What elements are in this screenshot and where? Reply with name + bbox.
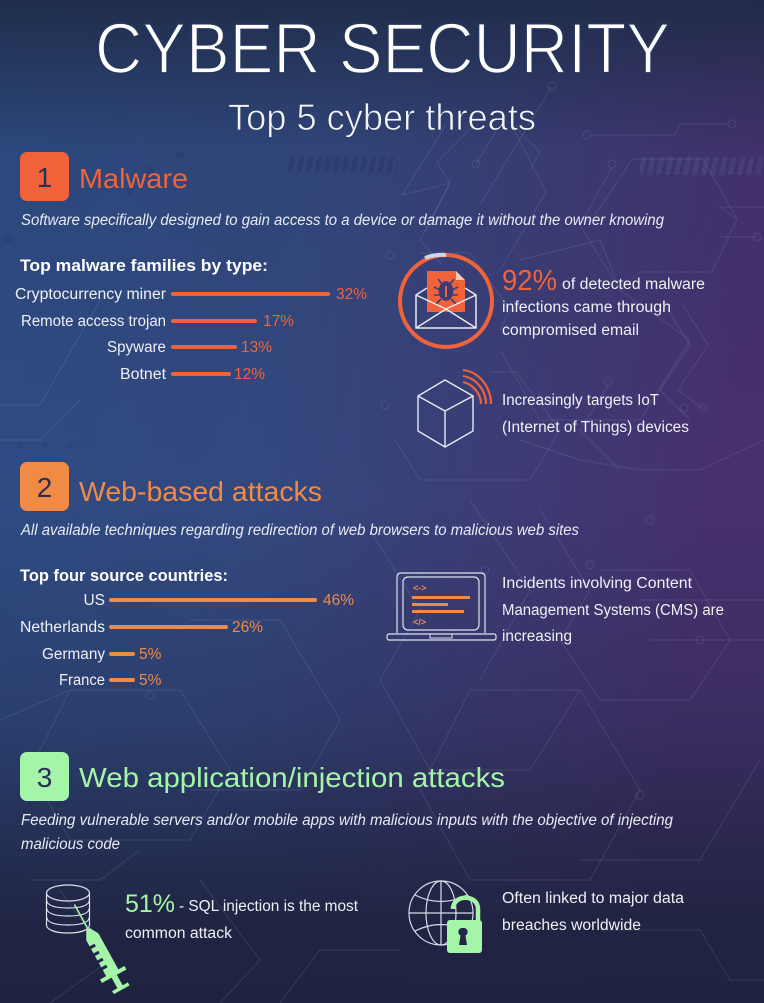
- bar chart: malware families: 17%: [263, 313, 294, 330]
- stat: 51% sql injection: common attack: [125, 925, 232, 942]
- subtitle: Top 5 cyber threats: [228, 97, 536, 138]
- decorative hash band: [3, 151, 764, 448]
- bar chart: malware families: [15, 286, 367, 383]
- injection description: malicious code: [21, 836, 120, 853]
- web attacks description: All available techniques regarding redirection of web browsers to malicious web sites: [20, 522, 579, 539]
- stat: 92% email: compromised email: [502, 322, 639, 339]
- injection description: Feeding vulnerable servers and/or mobile apps with malicious inputs with the objective of injecting: [21, 812, 673, 829]
- text: iot: Increasingly targets IoT: [502, 392, 660, 409]
- chart heading: source countries: Top four source countries:: [20, 566, 228, 585]
- number badge 2: [20, 462, 69, 511]
- text: iot: [502, 392, 689, 436]
- bar chart: malware families: 32%: [336, 286, 367, 303]
- bar chart: malware families: Botnet: [120, 366, 167, 383]
- heading: web-based attacks: Web-based attacks: [79, 476, 322, 507]
- number badge 2: 2: [37, 472, 52, 503]
- title: CYBER SECURITY: [95, 10, 670, 89]
- text: data breaches: Often linked to major data: [502, 890, 684, 907]
- panel: malware: [15, 152, 705, 447]
- injection description: [21, 812, 673, 853]
- stat: 51% sql injection: [125, 890, 359, 942]
- text: cms incidents: increasing: [502, 628, 572, 645]
- bar chart: source countries: 46%: [323, 592, 354, 609]
- icon: database and syringe: [46, 885, 134, 997]
- panel: web-based attacks: [20, 462, 724, 689]
- stat: 51% sql injection: 51%: [125, 890, 175, 918]
- text: cms incidents: [502, 575, 724, 645]
- bar chart: malware families: Cryptocurrency miner: [15, 286, 166, 303]
- bar chart: source countries: 5%: [139, 646, 162, 663]
- icon: infected email: [400, 255, 492, 347]
- stat: 51% sql injection: - SQL injection is the most: [179, 898, 359, 915]
- stat: 92% email: [502, 265, 705, 339]
- text: cms incidents: Management Systems (CMS) are: [502, 602, 724, 619]
- malware description: Software specifically designed to gain access to a device or damage it without the owner knowing: [21, 212, 664, 229]
- icon: laptop with code: </>: [413, 617, 426, 627]
- text: iot: (Internet of Things) devices: [502, 419, 689, 436]
- bar chart: source countries: 5%: [139, 672, 162, 689]
- bar chart: source countries: 26%: [232, 619, 263, 636]
- bar chart: source countries: France: [59, 672, 105, 689]
- bar chart: source countries: Netherlands: [20, 619, 105, 636]
- icon: laptop with code: [387, 573, 496, 640]
- bar chart: source countries: US: [83, 592, 105, 609]
- stat: 92% email: 92%: [502, 265, 557, 297]
- panel: web application attacks: [20, 752, 684, 997]
- heading: web application attacks: Web application/injection attacks: [79, 762, 505, 793]
- bar chart: malware families: Spyware: [107, 339, 166, 356]
- text: cms incidents: Incidents involving Content: [502, 575, 693, 592]
- text: data breaches: [502, 890, 684, 934]
- bar chart: source countries: [20, 592, 354, 689]
- chart heading: malware families: Top malware families by type:: [20, 256, 268, 275]
- bar chart: malware families: 13%: [241, 339, 272, 356]
- number badge 1: [20, 152, 69, 201]
- bar chart: malware families: 12%: [234, 366, 265, 383]
- number badge 3: [20, 752, 69, 801]
- text: data breaches: breaches worldwide: [502, 917, 641, 934]
- number badge 1: 1: [37, 162, 52, 193]
- icon: iot cube: [418, 370, 491, 447]
- bar chart: malware families: Remote access trojan: [21, 313, 166, 330]
- stat: 92% email: infections came through: [502, 299, 671, 316]
- stat: 92% email: of detected malware: [562, 276, 705, 293]
- icon: globe and padlock: [409, 881, 482, 953]
- heading: malware: Malware: [79, 163, 188, 194]
- number badge 3: 3: [37, 762, 52, 793]
- icon: laptop with code: <->: [413, 583, 427, 593]
- bar chart: source countries: Germany: [42, 646, 105, 663]
